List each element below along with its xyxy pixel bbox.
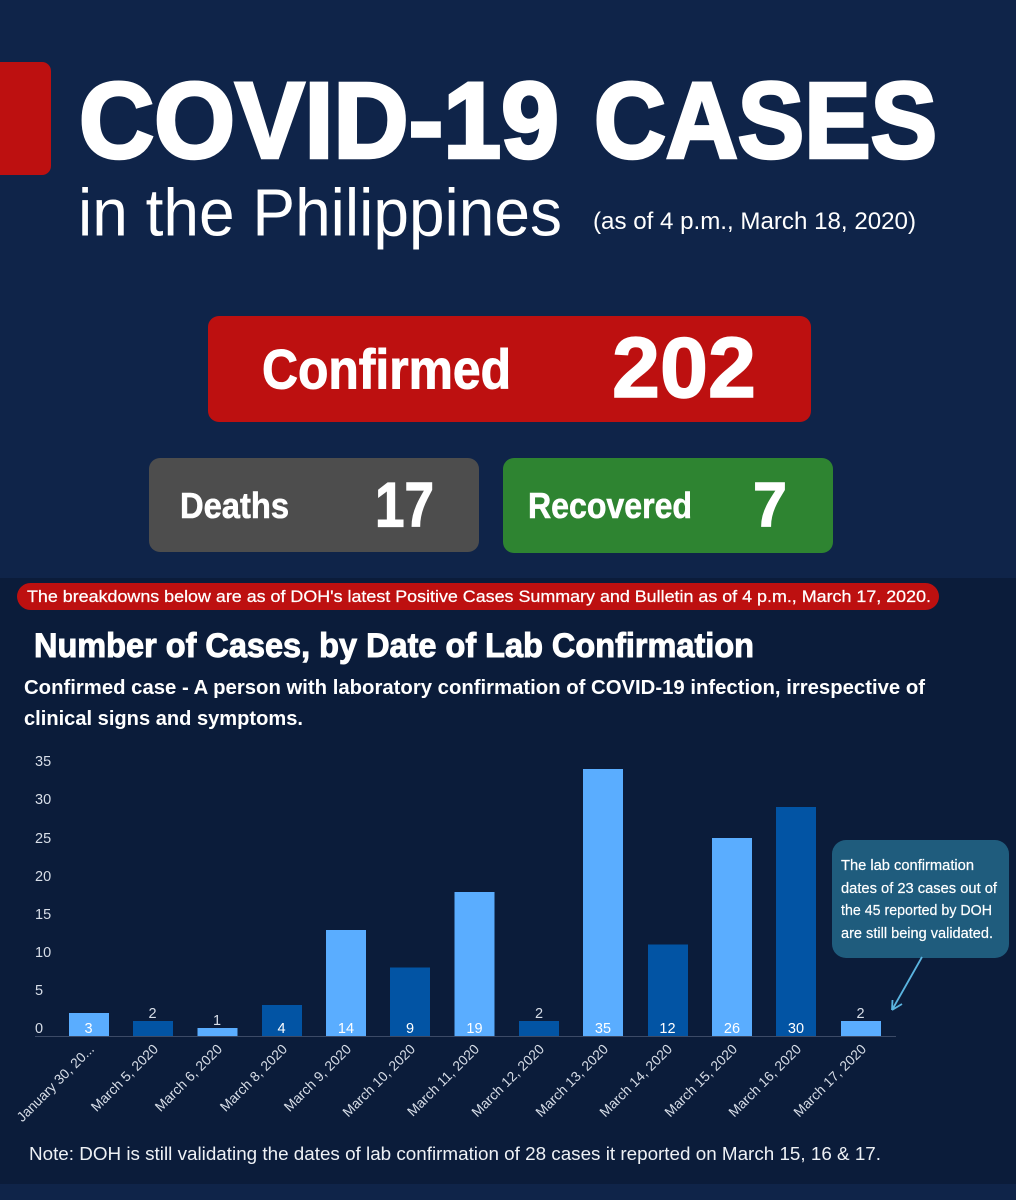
date labels: March 5, 2020 <box>88 1041 161 1114</box>
date labels: March 12, 2020 <box>469 1041 547 1120</box>
definition text <box>24 677 925 730</box>
date labels: March 10, 2020 <box>340 1041 418 1120</box>
value labels: 19 <box>466 1021 483 1037</box>
title: CASES <box>594 60 937 180</box>
y axis labels <box>35 754 51 1037</box>
value labels: 14 <box>338 1021 354 1037</box>
value labels: 2 <box>856 1006 865 1022</box>
value labels: 2 <box>535 1006 543 1022</box>
value labels: 3 <box>84 1021 93 1037</box>
panel: confirmed: Confirmed <box>262 338 511 400</box>
callout: the 45 reported by DOH <box>841 902 992 919</box>
bars <box>69 769 881 1036</box>
title: (as of 4 p.m., March 18, 2020) <box>593 208 916 235</box>
value labels: 30 <box>788 1021 804 1037</box>
y axis labels: 0 <box>35 1021 43 1037</box>
value labels: 26 <box>724 1021 740 1037</box>
y axis labels: 30 <box>35 792 51 808</box>
callout <box>832 840 1009 958</box>
lower panel background <box>0 578 1016 1184</box>
title <box>78 60 937 250</box>
value labels: 2 <box>148 1006 157 1022</box>
date labels: March 15, 2020 <box>662 1041 740 1120</box>
panel: deaths: 17 <box>375 470 434 540</box>
y axis labels: 35 <box>35 754 51 770</box>
callout: dates of 23 cases out of <box>841 880 998 897</box>
date labels: January 30, 20... <box>14 1042 97 1125</box>
panel: confirmed: 202 <box>612 321 756 416</box>
value labels: 12 <box>659 1021 676 1037</box>
value labels: 4 <box>277 1021 286 1037</box>
date labels: March 17, 2020 <box>791 1041 869 1120</box>
date labels: March 8, 2020 <box>217 1041 290 1114</box>
date labels: March 11, 2020 <box>404 1041 482 1119</box>
panel: deaths <box>149 458 479 552</box>
notice banner: The breakdowns below are as of DOH's latest Positive Cases Summary and Bulletin as of 4 p.m., March 17, 2020. <box>27 587 931 606</box>
chart heading: Number of Cases, by Date of Lab Confirmation <box>34 627 754 665</box>
value labels: 35 <box>595 1021 611 1037</box>
definition text: clinical signs and symptoms. <box>24 708 303 730</box>
date labels: March 6, 2020 <box>152 1041 225 1114</box>
callout: are still being validated. <box>841 925 993 942</box>
title: in the Philippines <box>78 176 562 250</box>
panel: recovered: Recovered <box>528 485 692 526</box>
value labels: 1 <box>213 1013 221 1029</box>
panel: deaths: Deaths <box>180 485 289 526</box>
panel: confirmed <box>208 316 811 422</box>
date labels: March 14, 2020 <box>597 1041 675 1120</box>
y axis labels: 15 <box>35 907 51 923</box>
footnote: Note: DOH is still validating the dates of lab confirmation of 28 cases it reported on March 15, 16 & 17. <box>29 1144 881 1164</box>
date labels: March 13, 2020 <box>533 1041 611 1120</box>
date labels <box>14 1041 869 1125</box>
axis line <box>35 1036 896 1037</box>
value labels <box>84 1006 865 1037</box>
callout: The lab confirmation <box>841 857 974 874</box>
title: COVID-19 <box>79 60 559 180</box>
date labels: March 16, 2020 <box>726 1041 804 1120</box>
value labels: 9 <box>406 1021 414 1037</box>
y axis labels: 10 <box>35 945 51 961</box>
y axis labels: 25 <box>35 831 51 847</box>
panel: recovered: 7 <box>753 470 787 540</box>
panel: recovered <box>503 458 833 553</box>
bar chart <box>14 754 896 1125</box>
date labels: March 9, 2020 <box>281 1041 354 1114</box>
y axis labels: 20 <box>35 869 51 885</box>
notice banner <box>17 583 939 610</box>
red accent tab <box>0 62 51 175</box>
y axis labels: 5 <box>35 983 43 999</box>
definition text: Confirmed case - A person with laboratory confirmation of COVID-19 infection, irrespective of <box>24 677 925 699</box>
arrow <box>892 957 922 1010</box>
